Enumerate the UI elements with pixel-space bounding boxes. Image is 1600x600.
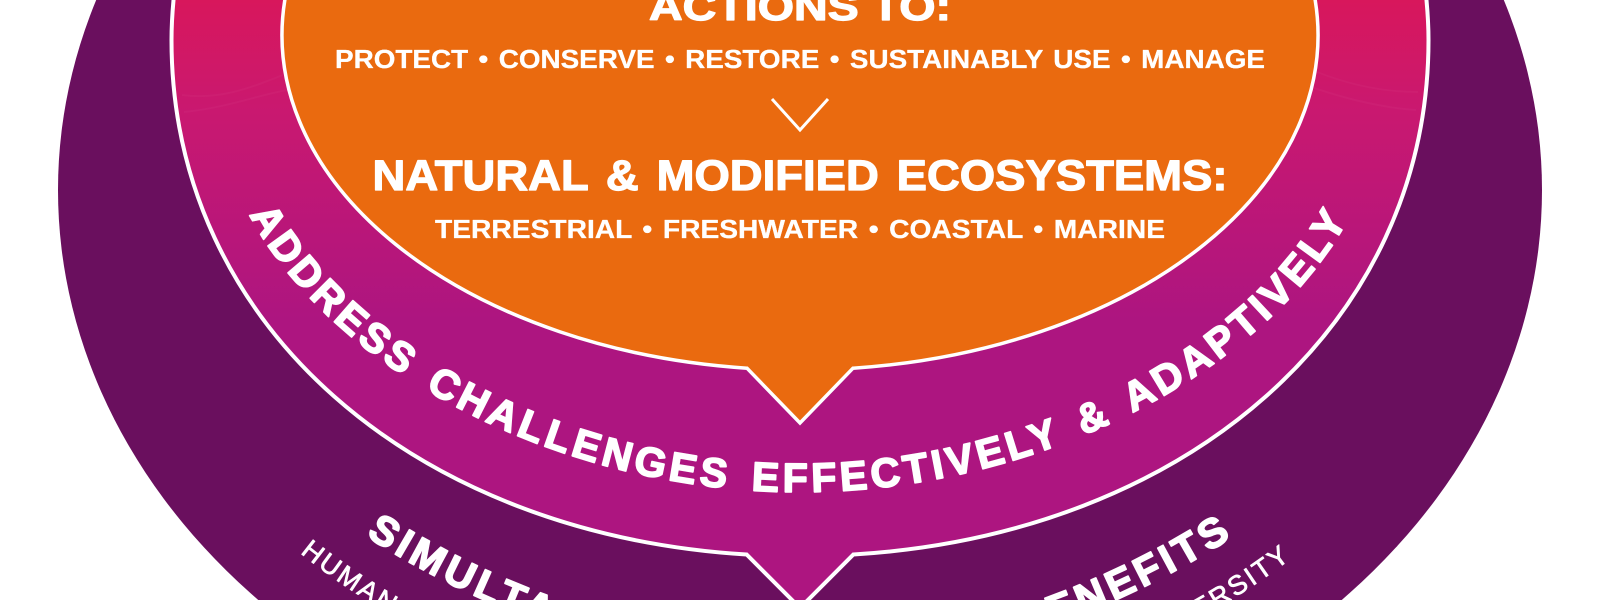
heading: natural and modified ecosystems: NATURAL & MODIFIED ECOSYSTEMS: [372, 152, 1228, 200]
text: action list: PROTECT • CONSERVE • RESTORE • SUSTAINABLY USE • MANAGE [335, 44, 1265, 74]
panel: magenta challenges layer [172, 0, 1428, 600]
curved heading: address challenges: ADDRESS CHALLENGES EFFECTIVELY & ADAPTIVELY [248, 206, 1343, 493]
text: ecosystem list: TERRESTRIAL • FRESHWATER • COASTAL • MARINE [435, 214, 1165, 244]
panel: orange actions and ecosystems layer [282, 0, 1318, 423]
icon: chevron arrow [772, 99, 828, 130]
